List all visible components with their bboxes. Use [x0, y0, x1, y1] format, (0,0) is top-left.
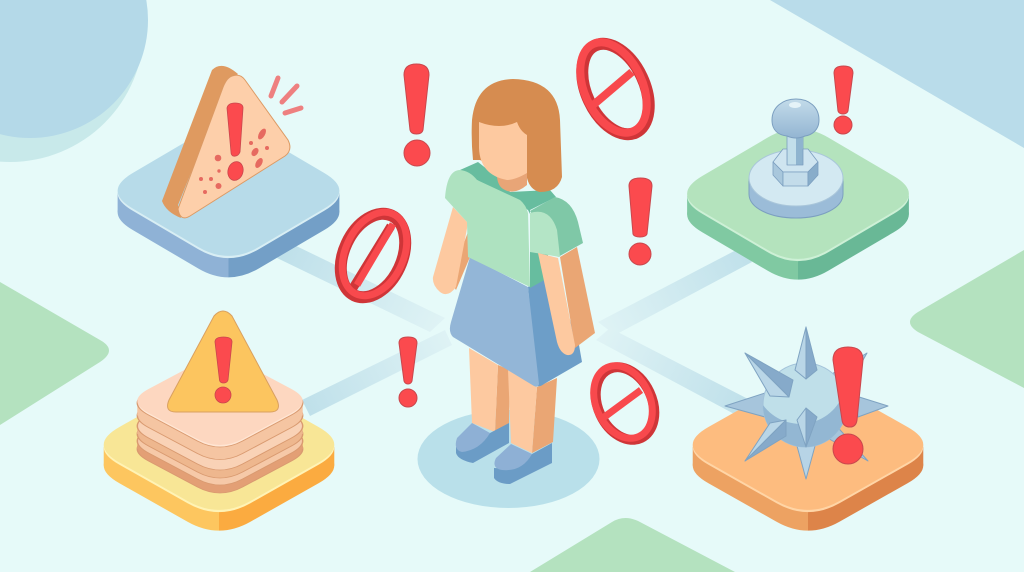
icon: joystick bolt — [749, 99, 843, 218]
skirt — [450, 257, 582, 387]
icon: prohibition sign top — [567, 32, 662, 145]
platform: green — [687, 129, 909, 280]
shoes — [456, 423, 552, 484]
icon: exclamation mark centre-right — [629, 178, 652, 265]
icon: exclamation mark top centre-left — [404, 64, 430, 166]
background shape: right green diamond — [910, 250, 1024, 388]
icon: prohibition sign left — [328, 202, 419, 308]
icon: spiked ball — [725, 327, 888, 479]
background shape: top-right band — [770, 0, 1024, 148]
background shape: left green diamond — [0, 282, 109, 425]
person — [418, 79, 600, 508]
background shape: bottom green diamond — [530, 518, 735, 572]
ground shadow — [418, 410, 600, 508]
platform: blue — [118, 126, 339, 277]
icon: irritated skin warning triangle — [162, 66, 301, 218]
legs — [469, 348, 557, 453]
connector lines — [277, 243, 752, 416]
icon: prohibition sign lower right — [582, 356, 666, 449]
hair — [472, 79, 562, 192]
left arm — [433, 207, 470, 294]
torso and sleeves — [445, 162, 583, 288]
right arm — [538, 247, 595, 355]
icon: yellow warning triangle — [168, 311, 278, 412]
neck — [497, 173, 527, 192]
platform: orange — [693, 380, 923, 531]
platform: yellow — [104, 380, 334, 531]
background shape: top-left circle — [0, 0, 148, 162]
icon: large exclamation mark — [833, 347, 863, 464]
icon: stacked skin layers — [137, 357, 303, 493]
face — [479, 122, 527, 180]
icon: exclamation mark lower-left — [399, 337, 417, 407]
icon: exclamation mark top right — [834, 66, 853, 134]
